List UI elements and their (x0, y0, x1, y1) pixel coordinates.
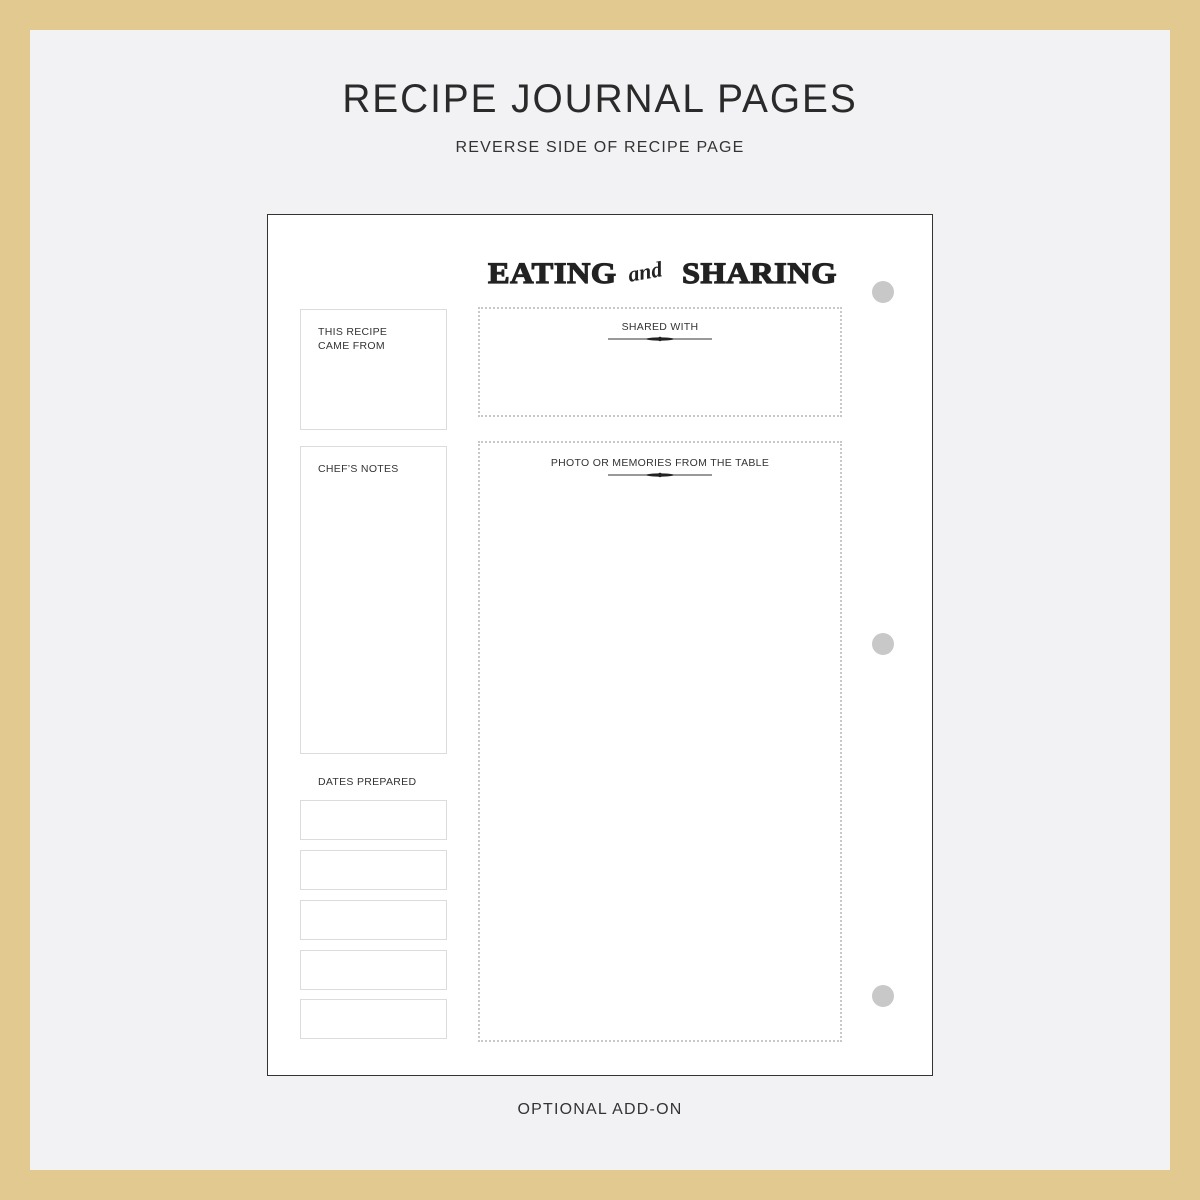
panel: chef's notes: CHEF’S NOTES (318, 463, 399, 475)
icon: binder hole middle (872, 633, 894, 655)
panel: this recipe came from (300, 309, 447, 430)
heading: eating and sharing: and (626, 256, 664, 287)
heading: eating and sharing: SHARING (682, 257, 837, 290)
panel: journal page (267, 214, 933, 1076)
panel: chef's notes (300, 446, 447, 754)
date boxes (300, 800, 447, 1039)
title: RECIPE JOURNAL PAGES (342, 77, 858, 121)
icon: binder hole top (872, 281, 894, 303)
panel: shared with: SHARED WITH (622, 321, 698, 333)
heading: eating and sharing (488, 256, 837, 290)
panel: shared with (478, 307, 842, 417)
panel: photo or memories (478, 441, 842, 1042)
icon: binder hole bottom (872, 985, 894, 1007)
panel: this recipe came from: CAME FROM (318, 340, 385, 352)
heading: eating and sharing: EATING (488, 257, 617, 290)
footer text: OPTIONAL ADD-ON (518, 1101, 682, 1118)
panel: this recipe came from: THIS RECIPE (318, 326, 387, 338)
panel: photo or memories: PHOTO OR MEMORIES FROM THE TABLE (551, 457, 769, 469)
subtitle: REVERSE SIDE OF RECIPE PAGE (455, 139, 745, 156)
label: dates prepared: DATES PREPARED (318, 776, 416, 788)
